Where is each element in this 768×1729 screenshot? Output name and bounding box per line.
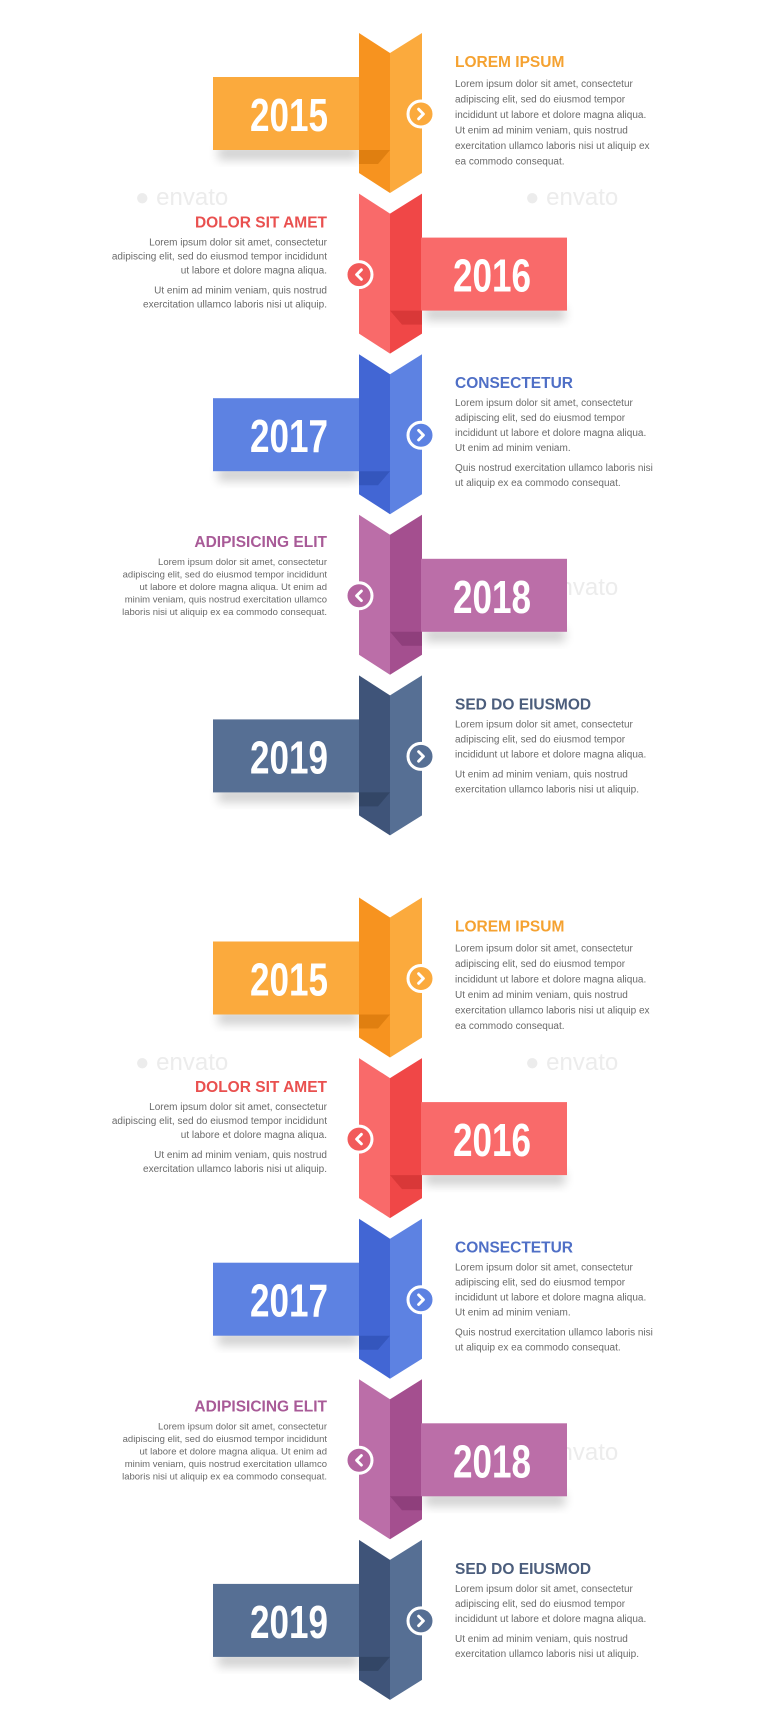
item: 2017: Lorem ipsum dolor sit amet, consectetur: [455, 398, 634, 409]
item: 2019: 2019: [250, 1596, 328, 1648]
item: 2016: [112, 1058, 567, 1218]
item: 2016: DOLOR SIT AMET: [195, 1079, 328, 1096]
item: 2016: [112, 194, 567, 354]
item: 2018: adipiscing elit, sed do eiusmod tempor incididunt: [123, 569, 327, 580]
item: 2017: ut aliquip ex ea commodo consequat.: [455, 1343, 621, 1354]
item: 2018: 2018: [453, 1435, 531, 1487]
item: 2015: Ut enim ad minim veniam, quis nostrud: [455, 990, 628, 1001]
item: 2019: SED DO EIUSMOD: [455, 696, 591, 713]
item: 2015: [213, 33, 650, 193]
item: 2019: adipiscing elit, sed do eiusmod tempor: [455, 734, 626, 745]
item: 2016: 2016: [453, 1114, 531, 1166]
item: 2018: [122, 515, 567, 675]
item: 2019: [213, 675, 646, 835]
item: 2018: [122, 1379, 567, 1539]
item: 2017: [213, 354, 653, 514]
timeline B: [112, 898, 653, 1700]
item: 2018: Lorem ipsum dolor sit amet, consectetur: [158, 557, 327, 568]
item: 2016: exercitation ullamco laboris nisi ut aliquip.: [143, 1164, 327, 1175]
watermark: envato: [135, 184, 618, 1466]
item: 2017: ut aliquip ex ea commodo consequat.: [455, 478, 621, 489]
item: 2015: LOREM IPSUM: [455, 54, 564, 71]
item: 2018: laboris nisi ut aliquip ex ea commodo consequat.: [122, 607, 327, 618]
watermark: envato: ● envato: [525, 574, 618, 601]
item: 2016: DOLOR SIT AMET: [195, 215, 328, 232]
item: 2017: CONSECTETUR: [455, 375, 573, 392]
item: 2019: [213, 1540, 646, 1700]
item: 2017: incididunt ut labore et dolore magna aliqua.: [455, 1293, 646, 1304]
item: 2018: adipiscing elit, sed do eiusmod tempor incididunt: [123, 1434, 327, 1445]
item: 2017: Lorem ipsum dolor sit amet, consectetur: [455, 1263, 634, 1274]
item: 2015: [213, 898, 650, 1058]
item: 2016: ut labore et dolore magna aliqua.: [181, 266, 327, 277]
watermark: envato: ● envato: [525, 1439, 618, 1466]
item: 2019: Lorem ipsum dolor sit amet, consectetur: [455, 719, 634, 730]
item: 2017: 2017: [250, 1275, 328, 1327]
item: 2019: Ut enim ad minim veniam, quis nostrud: [455, 1634, 628, 1645]
item: 2015: ea commodo consequat.: [455, 1021, 565, 1032]
watermark: envato: ● envato: [135, 1049, 228, 1076]
item: 2019: exercitation ullamco laboris nisi ut aliquip.: [455, 1649, 639, 1660]
item: 2018: ut labore et dolore magna aliqua. Ut enim ad: [140, 582, 327, 593]
item: 2017: [213, 1219, 653, 1379]
item: 2015: incididunt ut labore et dolore magna aliqua.: [455, 110, 646, 121]
item: 2017: Quis nostrud exercitation ullamco laboris nisi: [455, 1328, 653, 1339]
item: 2017: Quis nostrud exercitation ullamco laboris nisi: [455, 463, 653, 474]
item: 2019: Ut enim ad minim veniam, quis nostrud: [455, 769, 628, 780]
item: 2017: 2017: [250, 410, 328, 462]
item: 2017: CONSECTETUR: [455, 1240, 573, 1257]
item: 2015: ea commodo consequat.: [455, 156, 565, 168]
item: 2018: Lorem ipsum dolor sit amet, consectetur: [158, 1421, 327, 1432]
watermark: envato: ● envato: [525, 1049, 618, 1076]
item: 2016: Lorem ipsum dolor sit amet, consectetur: [149, 238, 328, 249]
item: 2019: SED DO EIUSMOD: [455, 1561, 591, 1578]
item: 2017: Ut enim ad minim veniam.: [455, 443, 571, 454]
item: 2018: ut labore et dolore magna aliqua. Ut enim ad: [140, 1446, 327, 1457]
watermark: envato: ● envato: [525, 184, 618, 211]
item: 2019: adipiscing elit, sed do eiusmod tempor: [455, 1599, 626, 1610]
item: 2015: Ut enim ad minim veniam, quis nostrud: [455, 126, 628, 136]
item: 2016: Ut enim ad minim veniam, quis nostrud: [154, 286, 327, 297]
item: 2018: minim veniam, quis nostrud exercitation ullamco: [125, 594, 327, 605]
item: 2017: adipiscing elit, sed do eiusmod tempor: [455, 413, 626, 424]
item: 2018: 2018: [453, 571, 531, 623]
item: 2019: incididunt ut labore et dolore magna aliqua.: [455, 1614, 646, 1625]
item: 2019: 2019: [250, 731, 328, 783]
item: 2018: laboris nisi ut aliquip ex ea commodo consequat.: [122, 1471, 327, 1482]
item: 2016: exercitation ullamco laboris nisi ut aliquip.: [143, 300, 327, 311]
item: 2015: adipiscing elit, sed do eiusmod tempor: [455, 94, 626, 106]
watermark: envato: ● envato: [135, 184, 228, 211]
item: 2015: incididunt ut labore et dolore magna aliqua.: [455, 974, 646, 986]
item: 2017: adipiscing elit, sed do eiusmod tempor: [455, 1278, 626, 1289]
item: 2019: exercitation ullamco laboris nisi ut aliquip.: [455, 784, 639, 795]
item: 2015: Lorem ipsum dolor sit amet, consectetur: [455, 944, 634, 954]
item: 2015: Lorem ipsum dolor sit amet, consectetur: [455, 79, 634, 90]
item: 2015: LOREM IPSUM: [455, 918, 564, 936]
item: 2016: adipiscing elit, sed do eiusmod tempor incididunt: [112, 1116, 327, 1127]
item: 2015: 2015: [250, 954, 328, 1006]
item: 2015: adipiscing elit, sed do eiusmod tempor: [455, 959, 626, 970]
item: 2016: Lorem ipsum dolor sit amet, consectetur: [149, 1102, 328, 1113]
item: 2015: exercitation ullamco laboris nisi ut aliquip ex: [455, 141, 650, 152]
item: 2016: ut labore et dolore magna aliqua.: [181, 1130, 327, 1141]
item: 2017: Ut enim ad minim veniam.: [455, 1308, 571, 1319]
item: 2018: minim veniam, quis nostrud exercitation ullamco: [125, 1459, 327, 1470]
item: 2015: 2015: [250, 89, 328, 141]
item: 2015: exercitation ullamco laboris nisi ut aliquip ex: [455, 1006, 650, 1016]
item: 2016: adipiscing elit, sed do eiusmod tempor incididunt: [112, 252, 327, 263]
item: 2018: ADIPISICING ELIT: [194, 534, 328, 551]
timeline A: [112, 33, 653, 835]
item: 2016: Ut enim ad minim veniam, quis nostrud: [154, 1150, 327, 1161]
item: 2017: incididunt ut labore et dolore magna aliqua.: [455, 428, 646, 439]
item: 2019: Lorem ipsum dolor sit amet, consectetur: [455, 1584, 634, 1595]
item: 2016: 2016: [453, 250, 531, 302]
item: 2018: ADIPISICING ELIT: [194, 1398, 328, 1415]
item: 2019: incididunt ut labore et dolore magna aliqua.: [455, 749, 646, 760]
